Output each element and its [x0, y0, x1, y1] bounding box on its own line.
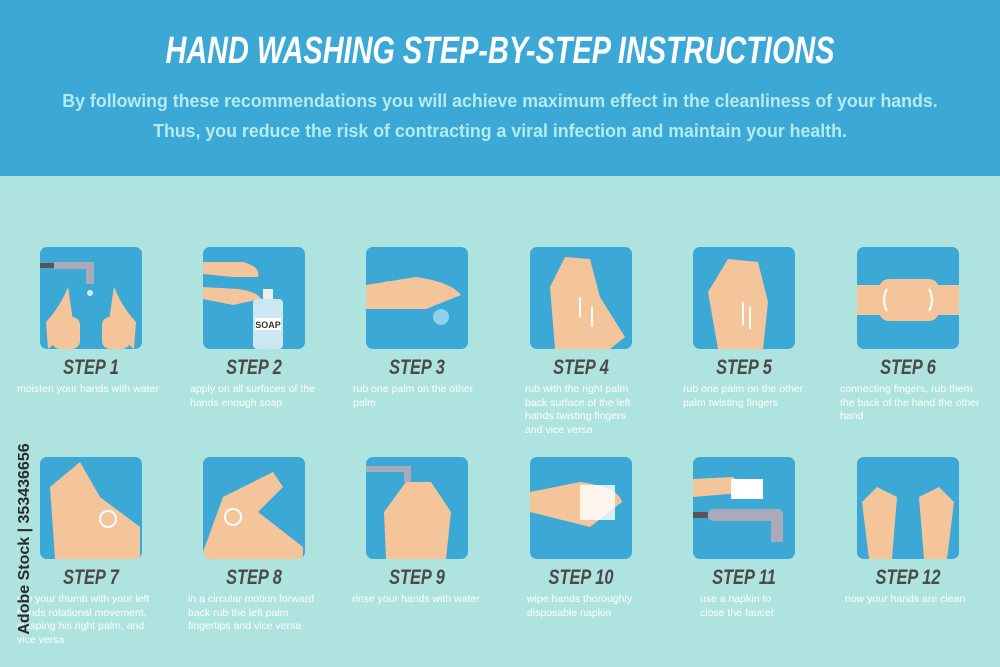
- icon: step 2: SOAP: [255, 320, 281, 330]
- text: STEP 8: [226, 566, 282, 589]
- icon: step 1: [40, 247, 142, 349]
- text: connecting fingers, rub them the back of the hand the other hand: [840, 383, 980, 422]
- subtitle line 2: Thus, you reduce the risk of contracting a viral infection and maintain your health.: [153, 120, 847, 141]
- text: STEP 5: [716, 356, 772, 379]
- descriptions row 2: [17, 593, 965, 646]
- icon: step 10: [530, 457, 632, 559]
- subtitle line 1: By following these recommendations you will achieve maximum effect in the cleanliness of your hands.: [62, 90, 938, 111]
- vertical watermark id: Adobe Stock | 353436656: [16, 443, 33, 635]
- text: rub one palm on the other palm: [353, 383, 473, 408]
- text: STEP 11: [712, 566, 776, 589]
- text: moisten your hands with water: [17, 383, 159, 395]
- step labels row 1: [63, 356, 936, 379]
- icon: step 3: [366, 247, 468, 349]
- text: now your hands are clean: [845, 593, 965, 605]
- text: STEP 7: [63, 566, 119, 589]
- text: rub with the right palm back surface of the left hands twisting fingers and vice versa: [525, 383, 631, 436]
- header band: [0, 0, 1000, 176]
- text: in a circular motion forward back rub the left palm fingertips and vice versa: [188, 593, 314, 632]
- text: STEP 12: [876, 566, 940, 589]
- icon: step 5: [693, 247, 795, 349]
- text: apply on all surfaces of the hands enough soap: [190, 383, 315, 408]
- icon: step 12: [857, 457, 959, 559]
- text: STEP 10: [549, 566, 613, 589]
- text: STEP 9: [389, 566, 445, 589]
- descriptions row 1: [17, 383, 980, 436]
- icon: step 11: [693, 457, 795, 559]
- text: STEP 4: [553, 356, 609, 379]
- icon: step 2: [203, 247, 305, 349]
- icon: step 8: [203, 457, 305, 559]
- text: rub one palm on the other palm twisting fingers: [683, 383, 803, 408]
- text: use a napkin to close the faucet: [700, 593, 774, 618]
- icon: step 7: [40, 457, 142, 559]
- text: STEP 3: [389, 356, 445, 379]
- step labels row 2: [63, 566, 940, 589]
- title: HAND WASHING STEP-BY-STEP INSTRUCTIONS: [165, 30, 835, 72]
- text: wipe hands thoroughly disposable napkin: [527, 593, 632, 618]
- text: rinse your hands with water: [352, 593, 480, 605]
- icon: step 4: [530, 247, 632, 349]
- text: STEP 2: [226, 356, 282, 379]
- icon: step 9: [366, 457, 468, 559]
- text: STEP 6: [880, 356, 936, 379]
- text: STEP 1: [63, 356, 119, 379]
- text: rub your thumb with your left hands rotational movement, clasping his right palm, and vice versa: [17, 593, 149, 646]
- icon: step 6: [857, 247, 959, 349]
